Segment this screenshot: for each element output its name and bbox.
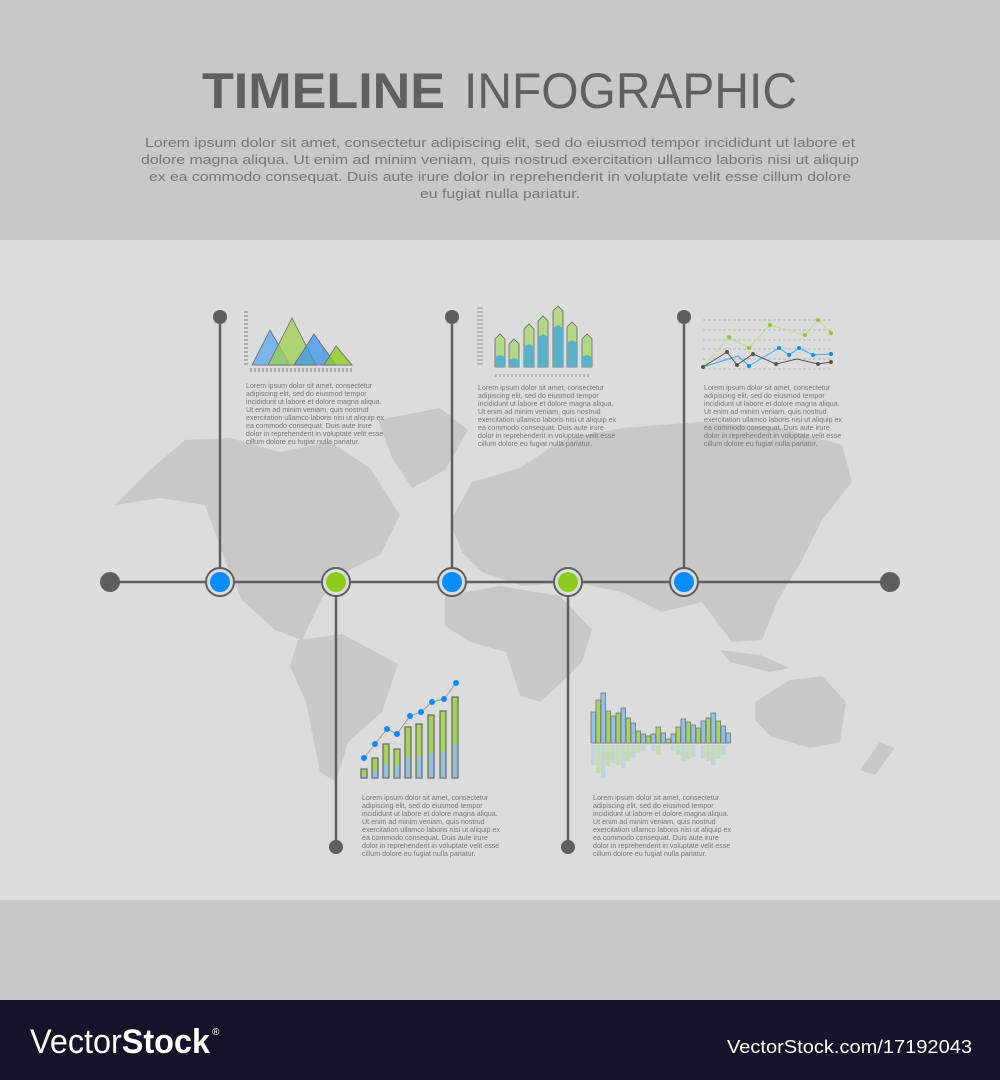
title: TIMELINE (202, 63, 445, 119)
text block 2: incididunt ut labore et dolore magna aliqua. (478, 400, 614, 408)
text block 5: ea commodo consequat. Duis aute irure (593, 834, 719, 842)
text block 3: incididunt ut labore et dolore magna aliqua. (704, 400, 840, 408)
text block 3 (704, 384, 842, 448)
chart: line chart (701, 318, 833, 369)
text block 1: Ut enim ad minim veniam, quis nostrud (246, 406, 369, 414)
text block 3: cillum dolore eu fugiat nulla pariatur. (704, 440, 818, 448)
intro paragraph: Lorem ipsum dolor sit amet, consectetur adipiscing elit, sed do eiusmod tempor incididunt ut labore et (145, 135, 855, 150)
text block 4: dolor in reprehenderit in voluptate velit esse (362, 842, 499, 850)
text block 4: exercitation ullamco laboris nisi ut aliquip ex (362, 826, 500, 834)
text block 4: adipiscing elit, sed do eiusmod tempor (362, 802, 483, 810)
footer: VectorStock.com/17192043 (727, 1037, 972, 1057)
text block 3: adipiscing elit, sed do eiusmod tempor (704, 392, 825, 400)
text blocks (246, 382, 842, 858)
text block 4: Ut enim ad minim veniam, quis nostrud (362, 818, 485, 826)
text block 5: incididunt ut labore et dolore magna aliqua. (593, 810, 729, 818)
text block 2: adipiscing elit, sed do eiusmod tempor (478, 392, 599, 400)
text block 4: Lorem ipsum dolor sit amet, consectetur (362, 794, 489, 802)
text block 2: dolor in reprehenderit in voluptate velit esse (478, 432, 615, 440)
text block 3: ea commodo consequat. Duis aute irure (704, 424, 830, 432)
text block 1: exercitation ullamco laboris nisi ut aliquip ex (246, 414, 384, 422)
text block 2: exercitation ullamco laboris nisi ut aliquip ex (478, 416, 616, 424)
title: INFOGRAPHIC (464, 63, 797, 119)
text block 2: ea commodo consequat. Duis aute irure (478, 424, 604, 432)
intro paragraph: eu fugiat nulla pariatur. (420, 186, 580, 201)
text block 3: dolor in reprehenderit in voluptate velit esse (704, 432, 841, 440)
chart: bars with reflection (591, 693, 731, 778)
chart: growth bars (361, 680, 459, 778)
text block 1: cillum dolore eu fugiat nulla pariatur. (246, 438, 360, 446)
text block 4: cillum dolore eu fugiat nulla pariatur. (362, 850, 476, 858)
text block 5 (593, 794, 731, 858)
world map (115, 408, 895, 782)
text block 1 (246, 382, 384, 446)
chart: mountains (244, 312, 352, 372)
text block 4 (362, 794, 500, 858)
intro paragraph (141, 135, 859, 201)
text block 4: incididunt ut labore et dolore magna aliqua. (362, 810, 498, 818)
text block 1: ea commodo consequat. Duis aute irure (246, 422, 372, 430)
text block 5: Lorem ipsum dolor sit amet, consectetur (593, 794, 720, 802)
text block 1: adipiscing elit, sed do eiusmod tempor (246, 390, 367, 398)
footer (0, 1000, 1000, 1080)
timeline axis (100, 310, 900, 854)
title (202, 63, 797, 119)
chart: arrow bars (477, 306, 592, 377)
text block 2: Ut enim ad minim veniam, quis nostrud (478, 408, 601, 416)
text block 3: exercitation ullamco laboris nisi ut aliquip ex (704, 416, 842, 424)
text block 2: Lorem ipsum dolor sit amet, consectetur (478, 384, 605, 392)
text block 5: Ut enim ad minim veniam, quis nostrud (593, 818, 716, 826)
footer: VectorStock (30, 1023, 210, 1061)
text block 5: exercitation ullamco laboris nisi ut aliquip ex (593, 826, 731, 834)
text block 2: cillum dolore eu fugiat nulla pariatur. (478, 440, 592, 448)
timeline nodes (206, 568, 698, 596)
text block 3: Ut enim ad minim veniam, quis nostrud (704, 408, 827, 416)
text block 1: Lorem ipsum dolor sit amet, consectetur (246, 382, 373, 390)
text block 5: cillum dolore eu fugiat nulla pariatur. (593, 850, 707, 858)
text block 5: adipiscing elit, sed do eiusmod tempor (593, 802, 714, 810)
text block 1: incididunt ut labore et dolore magna aliqua. (246, 398, 382, 406)
intro paragraph: dolore magna aliqua. Ut enim ad minim veniam, quis nostrud exercitation ullamco laboris nisi ut aliquip (141, 152, 859, 167)
text block 5: dolor in reprehenderit in voluptate velit esse (593, 842, 730, 850)
footer: ® (212, 1027, 220, 1038)
text block 1: dolor in reprehenderit in voluptate velit esse (246, 430, 383, 438)
text block 2 (478, 384, 616, 448)
text block 4: ea commodo consequat. Duis aute irure (362, 834, 488, 842)
text block 3: Lorem ipsum dolor sit amet, consectetur (704, 384, 831, 392)
intro paragraph: ex ea commodo consequat. Duis aute irure dolor in reprehenderit in voluptate velit esse cillum dolore (149, 169, 851, 184)
